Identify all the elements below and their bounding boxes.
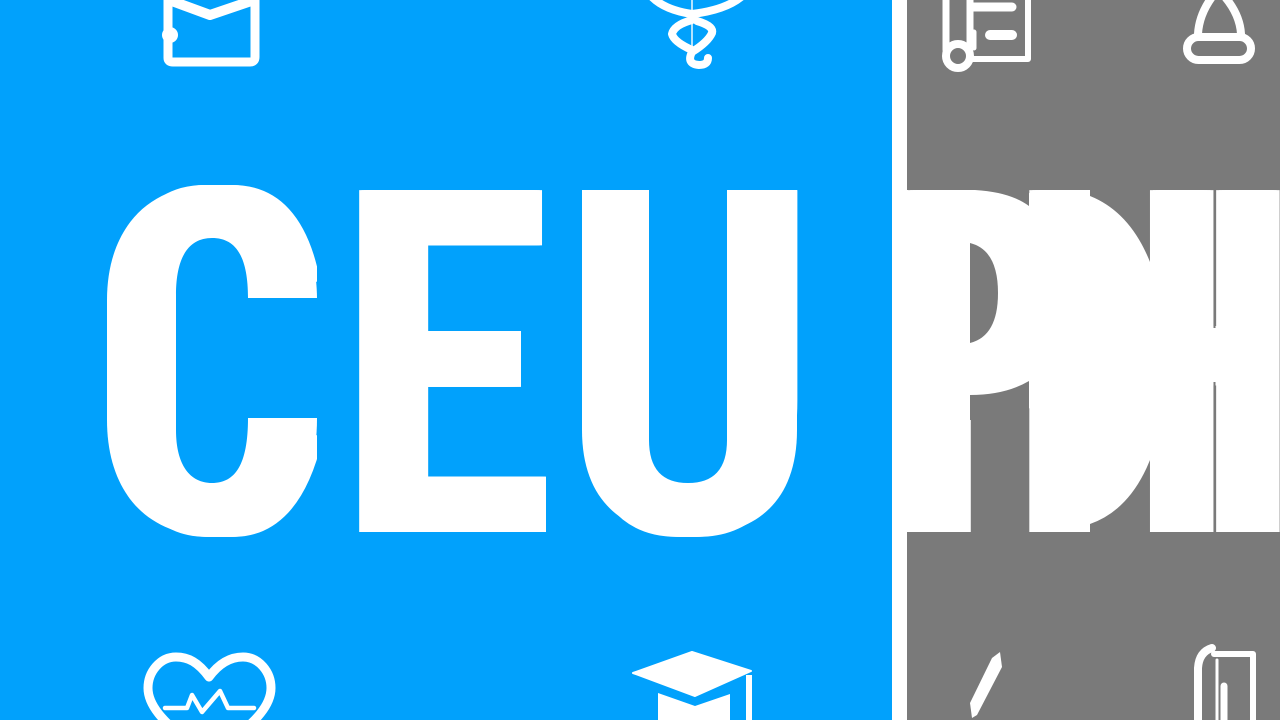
icon: bell	[1187, 0, 1251, 60]
panel: grey right background	[907, 0, 1280, 720]
icon: pen	[970, 652, 1002, 718]
letter C: C	[94, 83, 303, 638]
icon: clipped document	[1198, 648, 1253, 720]
letter P: P	[891, 83, 1053, 638]
panel: blue left background	[0, 0, 892, 720]
letter D: D	[1018, 83, 1140, 638]
letter E: E	[340, 83, 531, 638]
letter H: H	[1140, 83, 1248, 638]
icon: envelope tablet	[162, 0, 255, 62]
icon: document scroll	[946, 0, 1028, 68]
letter U: U	[563, 83, 796, 638]
icon: caduceus	[652, 0, 741, 65]
icon: heart with pulse	[148, 657, 271, 720]
icon: graduation cap	[633, 652, 751, 720]
H counter slit	[1214, 190, 1216, 532]
